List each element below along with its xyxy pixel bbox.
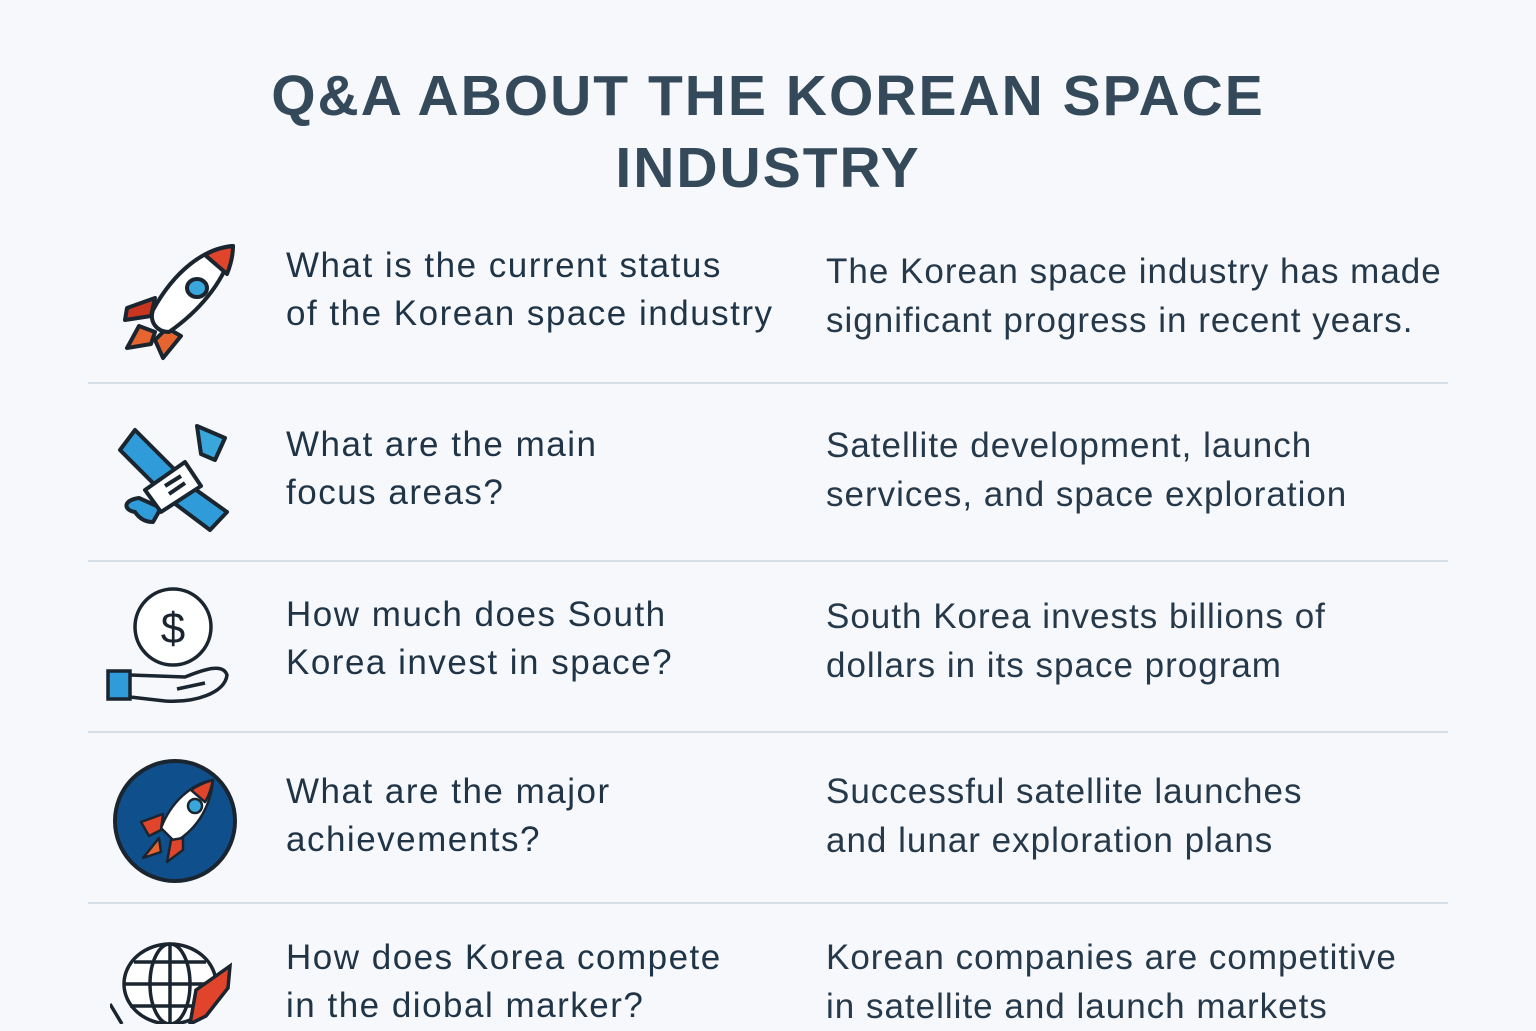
row 2 question: focus areas? <box>286 473 504 512</box>
icon: money hand: $ <box>161 604 185 653</box>
row 4 question: achievements? <box>286 820 541 859</box>
row 3 question: How much does South <box>286 595 667 634</box>
icon: globe <box>110 942 232 1024</box>
row 3 answer: South Korea invests billions of <box>826 597 1326 636</box>
title: INDUSTRY <box>615 136 921 200</box>
row 3 question: Korea invest in space? <box>286 643 673 682</box>
row 1 question: of the Korean space industry <box>286 294 774 333</box>
row 3 answer: dollars in its space program <box>826 646 1282 685</box>
icon: rocket <box>123 244 235 360</box>
row 4 answer: and lunar exploration plans <box>826 821 1273 860</box>
title <box>271 64 1265 200</box>
row 1 question <box>286 246 774 333</box>
row 4 answer <box>826 772 1302 860</box>
icon: rocket badge <box>113 759 237 883</box>
row 5 answer: in satellite and launch markets <box>826 987 1328 1026</box>
row 5 question: in the diobal marker? <box>286 986 644 1025</box>
row 1 answer <box>826 252 1442 340</box>
row 5 answer <box>826 938 1397 1026</box>
row 1 answer: The Korean space industry has made <box>826 252 1442 291</box>
row 1 question: What is the current status <box>286 246 722 285</box>
row 3 question <box>286 595 673 682</box>
row 2 question: What are the main <box>286 425 597 464</box>
row 3 answer <box>826 597 1326 685</box>
row 2 answer <box>826 426 1347 514</box>
row 4 question: What are the major <box>286 772 611 811</box>
title: Q&A ABOUT THE KOREAN SPACE <box>271 64 1265 128</box>
row 1 answer: significant progress in recent years. <box>826 301 1414 340</box>
row 5 answer: Korean companies are competitive <box>826 938 1397 977</box>
row 5 question <box>286 938 722 1025</box>
row 2 answer: Satellite development, launch <box>826 426 1312 465</box>
icon: satellite <box>118 424 230 532</box>
row 2 question <box>286 425 597 512</box>
icon: money hand <box>106 587 229 703</box>
row 4 answer: Successful satellite launches <box>826 772 1302 811</box>
row 2 answer: services, and space exploration <box>826 475 1347 514</box>
row 4 question <box>286 772 611 859</box>
row 5 question: How does Korea compete <box>286 938 722 977</box>
